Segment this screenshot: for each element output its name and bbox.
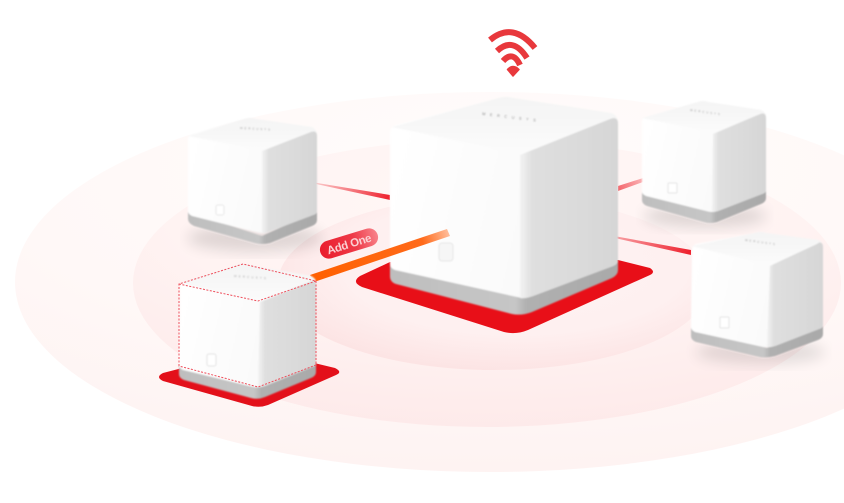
router: top right satellite: MERCUSYS	[690, 108, 720, 116]
router: bottom right satellite	[691, 232, 825, 364]
red pad: added router	[159, 362, 339, 407]
red pad: main router	[356, 260, 653, 333]
add-one link	[310, 229, 450, 282]
link: top right cube to main cube	[618, 171, 665, 191]
add one label	[318, 226, 380, 261]
router: main centre	[390, 97, 618, 315]
router: top left satellite	[187, 118, 323, 252]
link: bottom right cube to main cube	[570, 228, 691, 255]
router: top left satellite: MERCUSYS	[240, 126, 270, 132]
wifi icon	[490, 32, 535, 76]
router: bottom right satellite: MERCUSYS	[745, 238, 775, 246]
router: added satellite with dashed outline: MERCUSYS	[234, 274, 266, 280]
link: left cube to main cube	[293, 179, 390, 200]
router: main centre: MERCUSYS	[482, 111, 536, 123]
pair button	[439, 243, 453, 261]
dashed outline	[179, 264, 316, 387]
router: top right satellite	[642, 101, 767, 228]
coverage rings	[15, 92, 844, 472]
add one label: Add One	[326, 232, 373, 257]
router: added satellite with dashed outline	[179, 264, 316, 399]
